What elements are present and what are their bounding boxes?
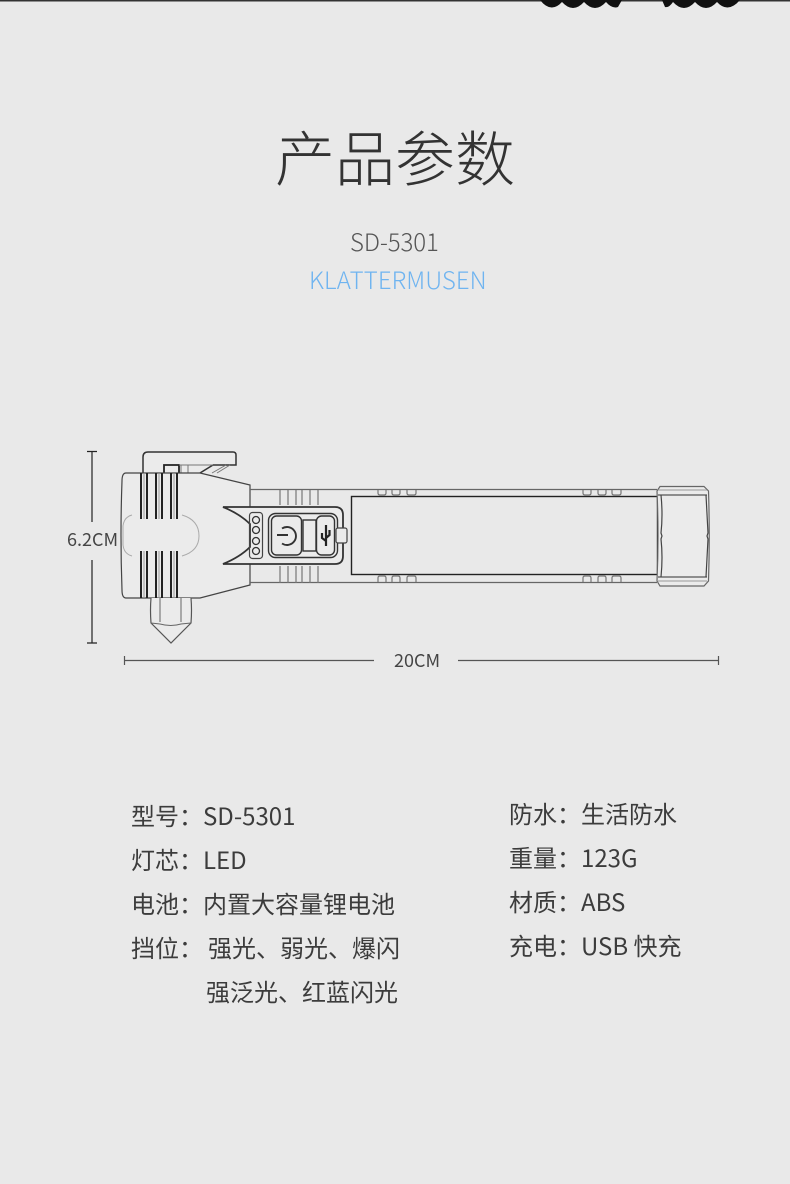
spec: battery: 电池：内置大容量锂电池 [131, 885, 395, 920]
specs right column [509, 795, 682, 962]
safety cutter hook [143, 452, 236, 473]
width label: 20CM [394, 647, 440, 673]
specs left column [131, 797, 400, 1008]
control panel with buttons [223, 507, 347, 564]
spec: waterproof: 防水：生活防水 [509, 795, 677, 830]
spec: modes: 挡位：强光、弱光、爆闪 [131, 929, 400, 964]
flashlight head [121, 473, 250, 598]
title: 产品参数 [275, 112, 515, 199]
spec: modes line 2: 强泛光、红蓝闪光 [206, 973, 398, 1008]
height dimension line [87, 451, 97, 643]
glass breaker tip [150, 598, 192, 643]
spec: material: 材质：ABS [509, 883, 625, 918]
spec: weight: 重量：123G [509, 839, 638, 874]
spec: LED: 灯芯：LED [131, 841, 247, 876]
model number: SD-5301 [350, 223, 439, 258]
top edge decoration [0, 0, 790, 8]
spec: model: 型号：SD-5301 [131, 797, 295, 832]
height label: 6.2CM [67, 526, 118, 552]
spec: charging: 充电：USB 快充 [509, 927, 682, 962]
flashlight body [250, 490, 658, 583]
brand name: KLATTERMUSEN [309, 261, 487, 296]
tail cap [657, 486, 709, 586]
width dimension line [124, 656, 718, 665]
